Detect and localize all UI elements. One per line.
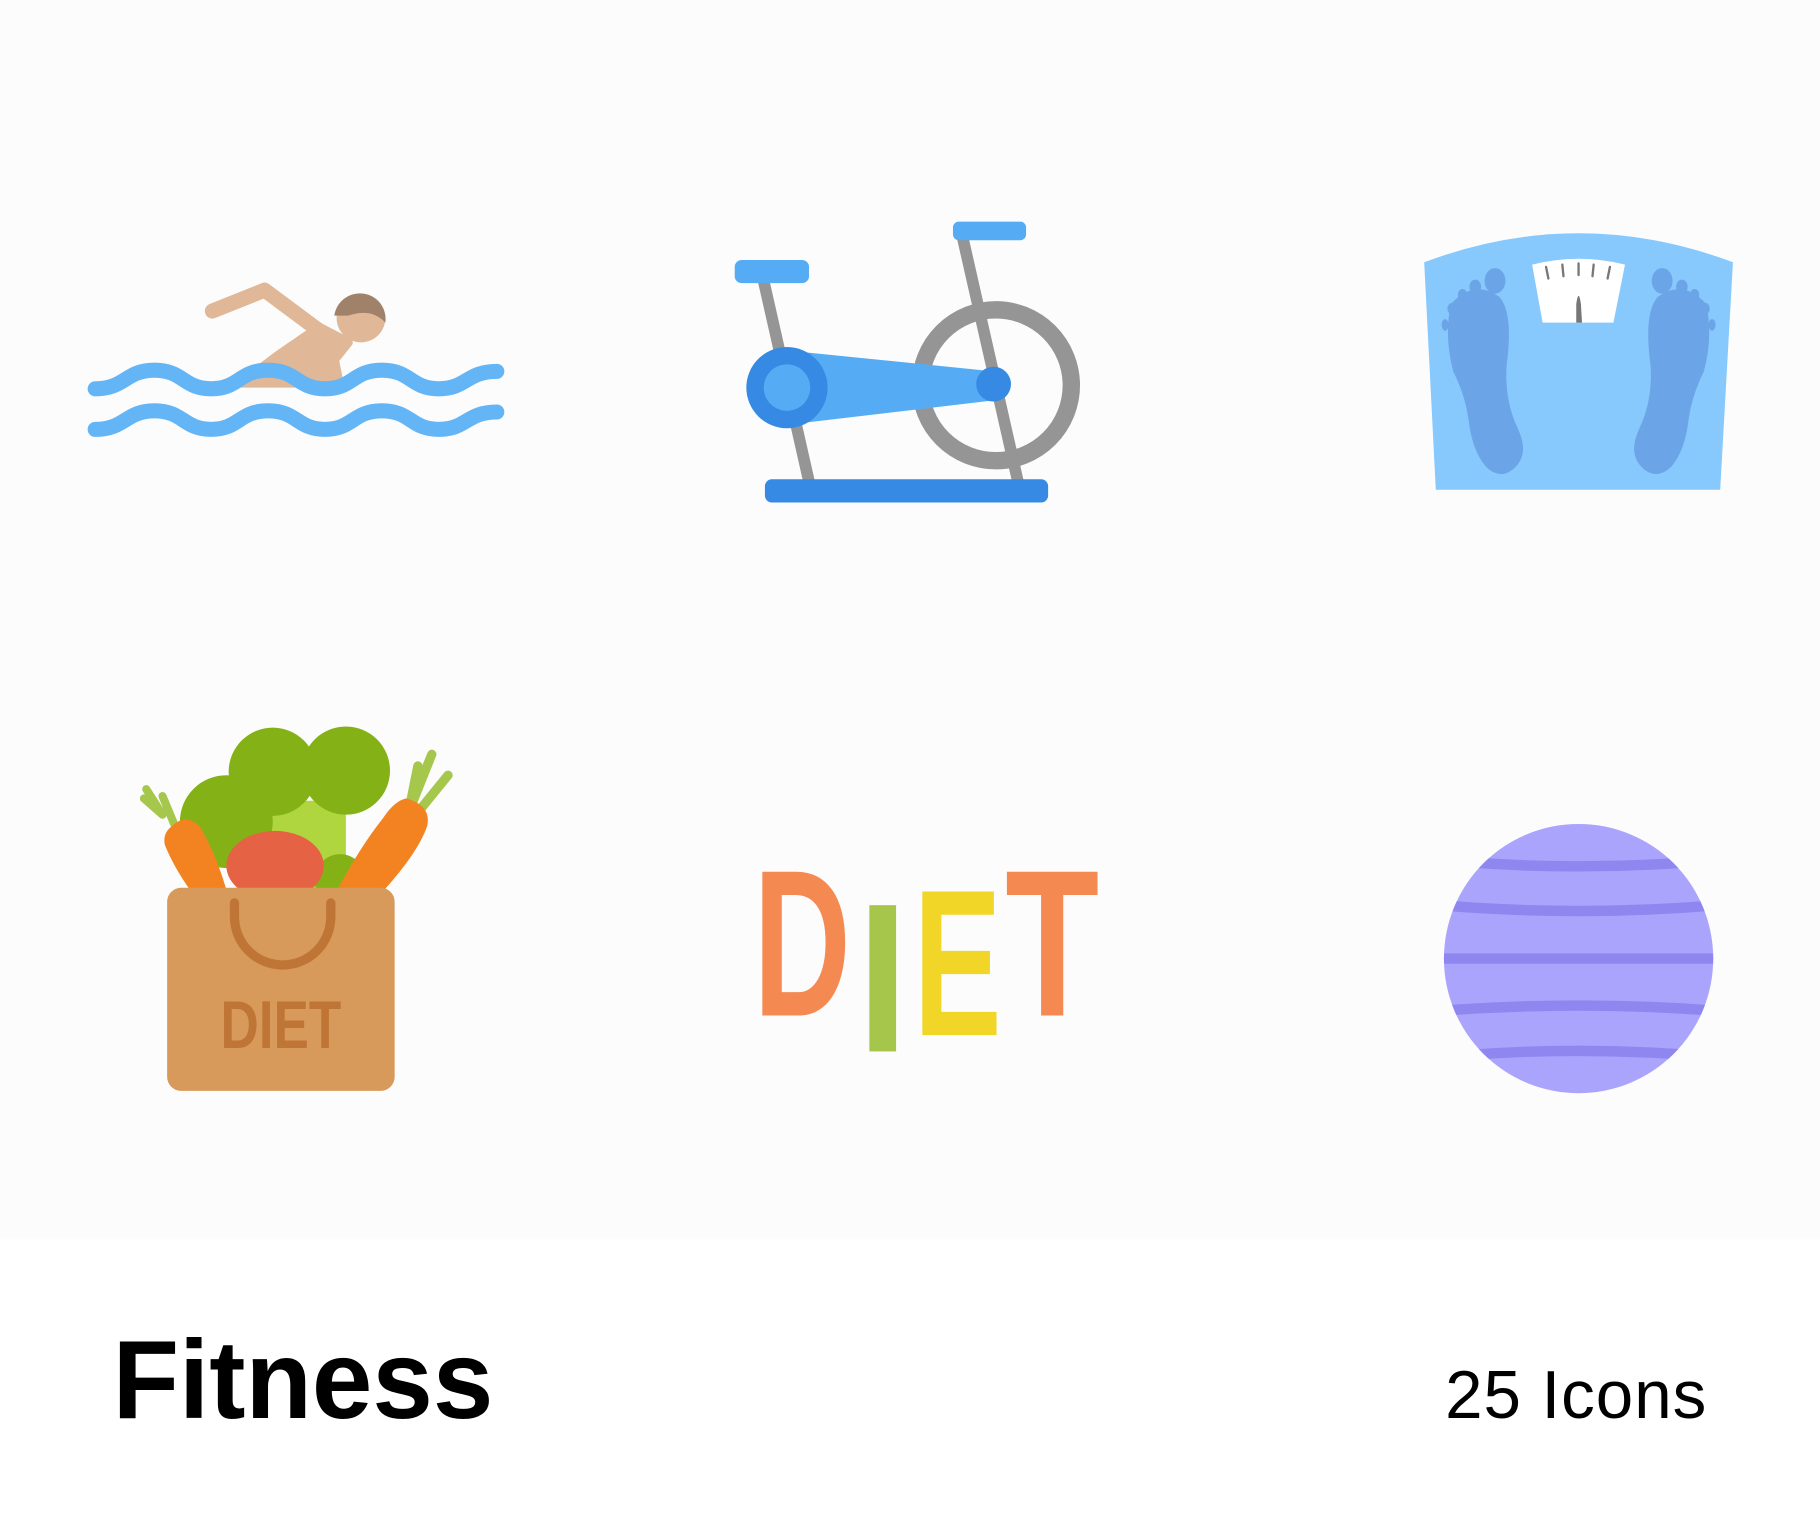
icon: swimmer [95,290,497,429]
icon: exercise bike [735,222,1071,503]
icon: DIET letters: T [1005,827,1099,1060]
icon: DIET letters: E [913,847,1002,1080]
icon: diet grocery bag [144,726,448,1091]
title: Fitness [113,1317,493,1442]
icon: exercise ball [1439,824,1718,1093]
icon: bathroom scale [1424,233,1733,490]
icon: DIET letters [753,827,1099,1080]
subtitle: icon count: 25 Icons [1445,1358,1706,1433]
icon: DIET letters: D [753,827,851,1060]
icon: diet grocery bag: DIET [221,988,341,1063]
